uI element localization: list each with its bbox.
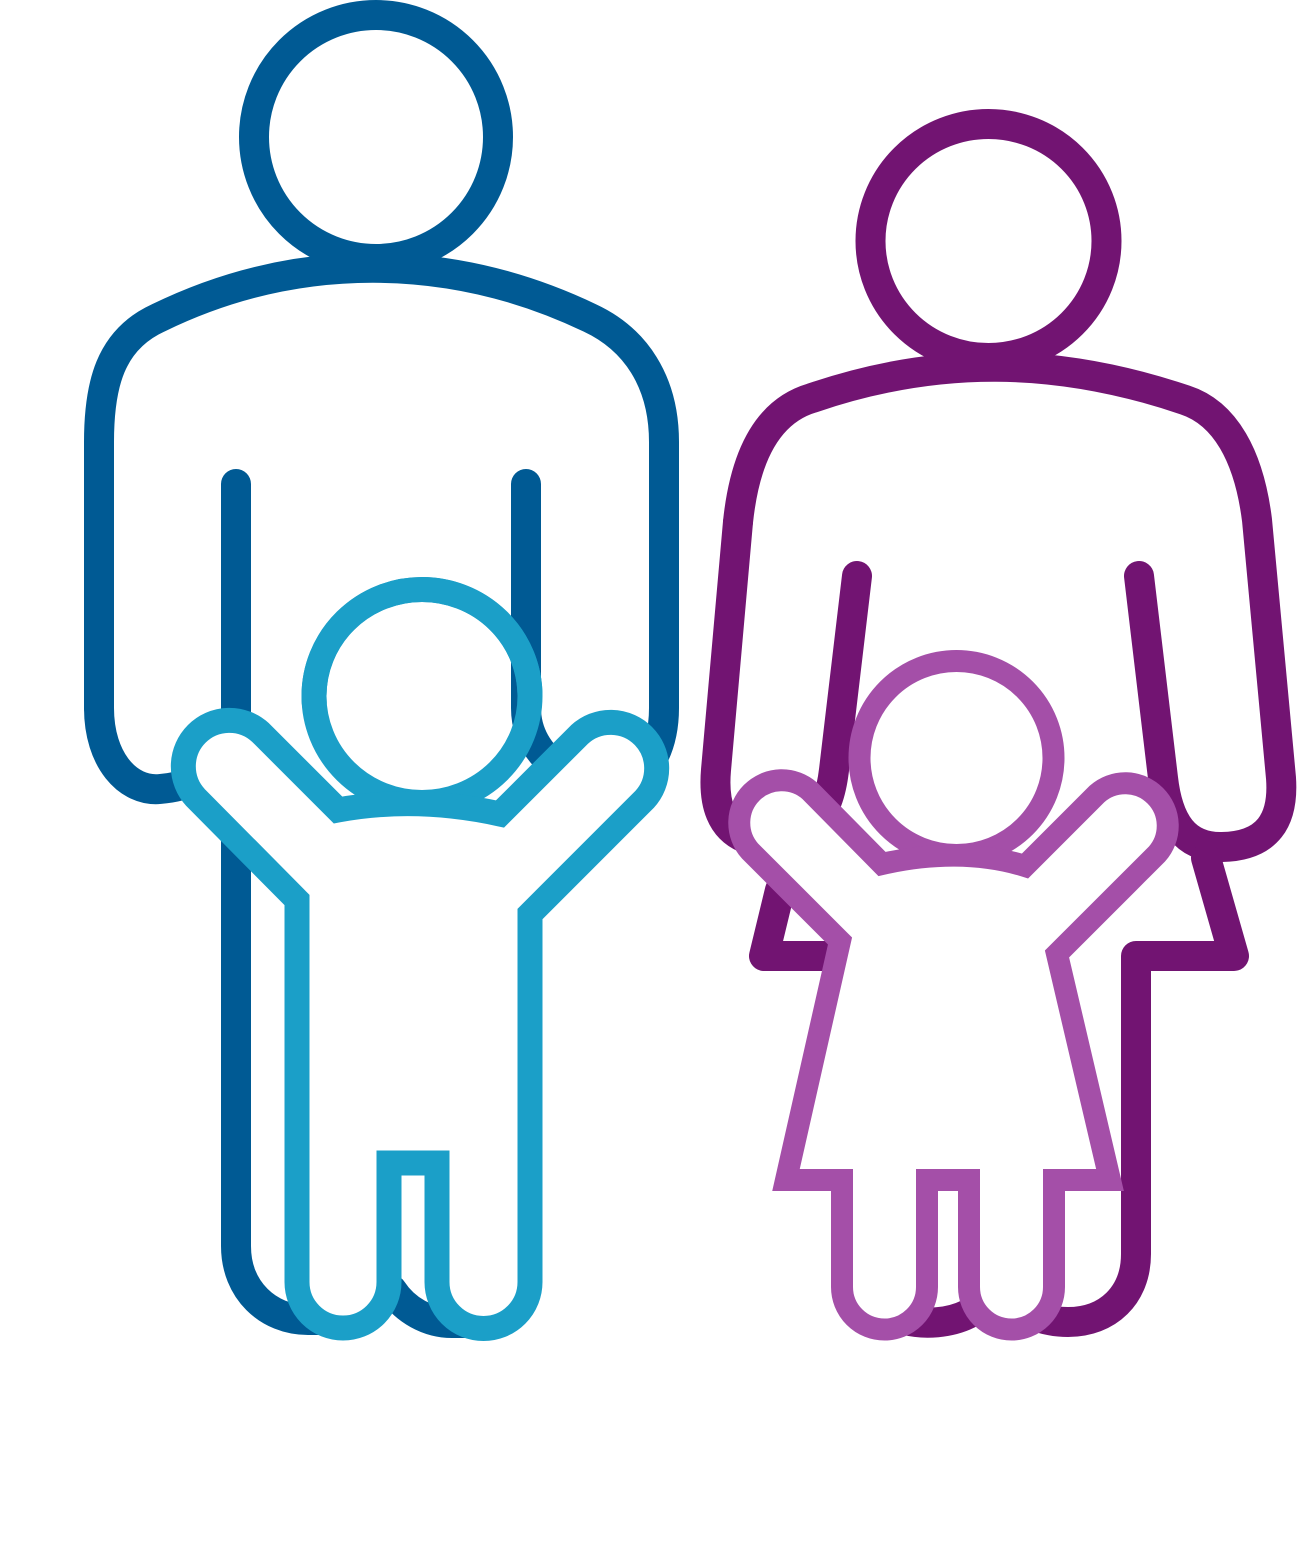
icon: boy child [183,590,657,1328]
icon: girl child [739,661,1168,1330]
icon: adult woman [715,124,1281,1323]
icon: adult man [99,15,664,1323]
